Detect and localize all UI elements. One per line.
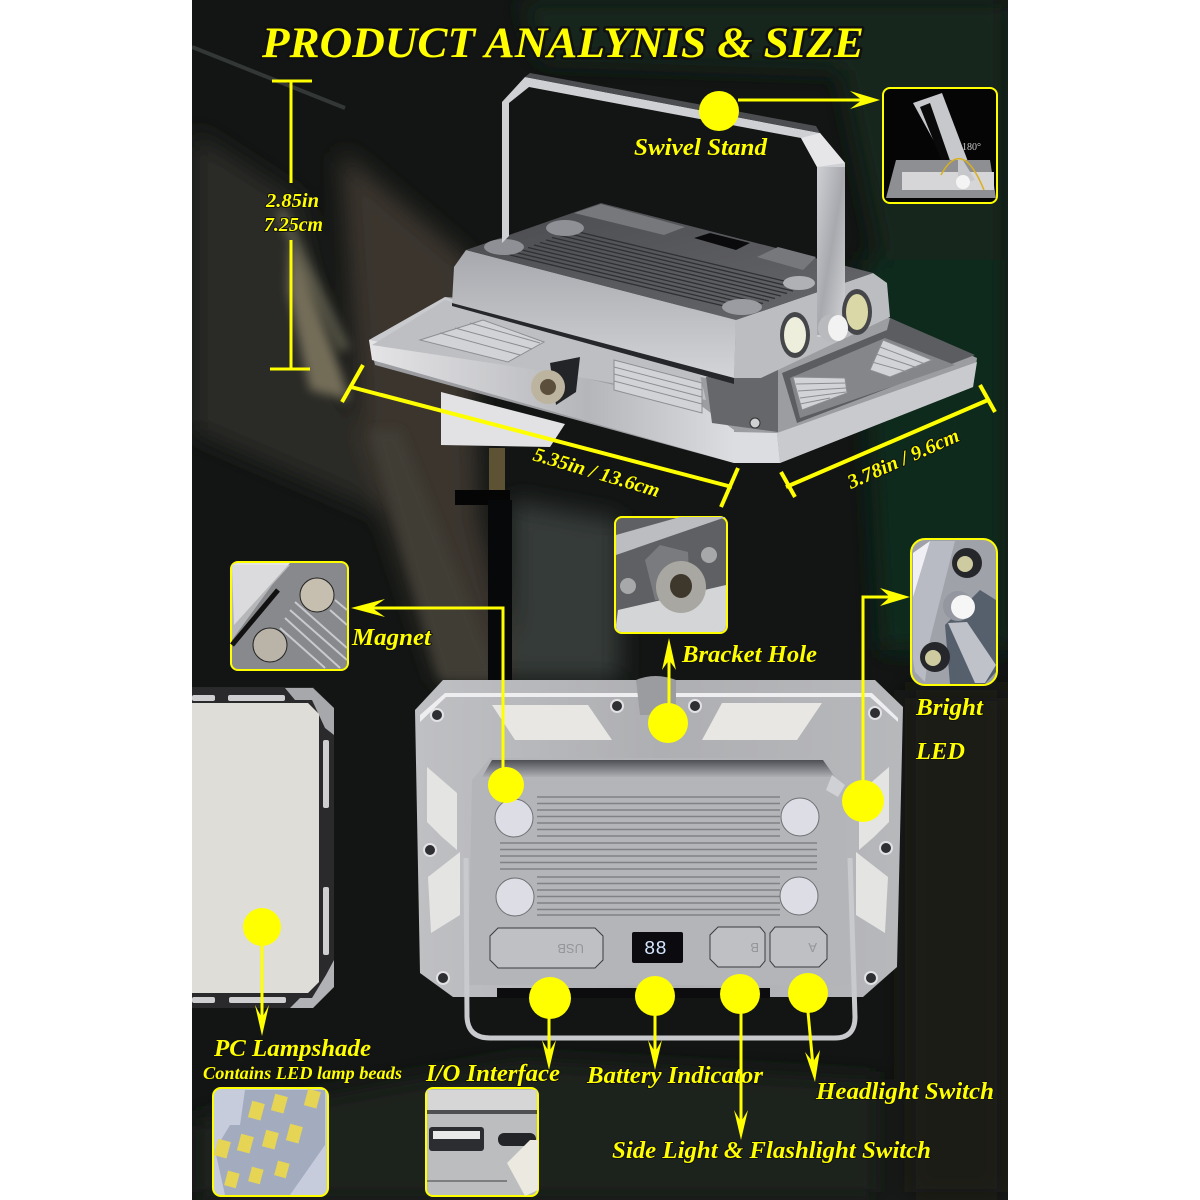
screws: [424, 700, 892, 984]
width dimension: 5.35in / 13.6cm: [531, 444, 662, 502]
bright LED label: [915, 695, 984, 765]
dark side panel: [706, 370, 778, 432]
USB button: [490, 928, 603, 968]
depth dimension: 3.78in / 9.6cm: [843, 425, 963, 494]
inset: magnet: [231, 562, 348, 670]
inset: LED beads: [213, 1088, 328, 1196]
product: back view lamp: A: [808, 940, 817, 955]
side light and flashlight switch callout: Side Light & Flashlight Switch: [612, 1138, 931, 1164]
PC lampshade callout: Contains LED lamp beads: [203, 1063, 402, 1083]
bright LED label: Bright: [915, 695, 984, 721]
mount underneath: [441, 392, 565, 447]
LEDs: [780, 312, 810, 358]
bottom slot: [497, 988, 770, 998]
PC lampshade callout: PC Lampshade: [213, 1036, 371, 1062]
bracket hole label: Bracket Hole: [681, 642, 817, 668]
handle: [502, 77, 845, 337]
top display: [694, 233, 750, 250]
lower vents: [420, 320, 932, 413]
side lights: [427, 767, 457, 850]
inset: bright LED: [911, 539, 997, 685]
battery indicator callout: Battery Indicator: [586, 1063, 764, 1089]
digital display: [632, 932, 683, 963]
corner chrome: [734, 432, 780, 463]
screw: [750, 418, 760, 428]
swivel stand callout: Swivel Stand: [634, 135, 768, 161]
bracket hole: [550, 357, 580, 405]
top ridges: [510, 230, 805, 311]
I/O interface callout: I/O Interface: [425, 1061, 560, 1087]
background photo: tent at night: [192, 0, 1008, 1200]
top circular pads: [484, 239, 524, 255]
bracket hole callout line: [648, 638, 688, 743]
depth dimension: [781, 385, 995, 497]
upper housing front face: [452, 250, 736, 378]
inset: I/O ports: [426, 1088, 538, 1196]
magnet pads: [495, 798, 819, 916]
swivel stand callout: [634, 91, 880, 161]
title: PRODUCT ANALYNIS & SIZE: [261, 20, 864, 67]
center plate: [468, 758, 850, 985]
PC lampshade callout: [203, 908, 402, 1083]
battery indicator callout: [586, 976, 764, 1089]
base plate: [369, 297, 977, 463]
product: angled view lamp: [369, 73, 977, 463]
top USB and button panels: [574, 204, 685, 235]
inset: swivel stand: 180°: [962, 142, 981, 153]
upper housing right face: [734, 273, 890, 378]
product: back view lamp: 88: [644, 938, 667, 960]
height dimension: 2.85in: [265, 190, 319, 212]
height dimension: 7.25cm: [264, 214, 323, 236]
pivot: [818, 314, 846, 342]
headlight switch callout: [788, 973, 994, 1105]
upper housing top face: [466, 203, 873, 320]
side light and flashlight switch callout: [612, 974, 931, 1164]
inset: bracket hole: [615, 517, 727, 633]
width dimension: [342, 365, 738, 507]
ridges: [500, 797, 817, 915]
product: back view lamp: B: [750, 940, 759, 955]
top lights: [492, 705, 612, 740]
left panel: PC lampshade: [192, 687, 334, 1008]
top bracket: [636, 676, 676, 715]
switch buttons: [710, 927, 765, 967]
product: back view lamp: USB: [557, 941, 584, 956]
inset: swivel stand: [883, 88, 997, 203]
magnet label: Magnet: [351, 625, 432, 651]
I/O interface callout: [425, 977, 571, 1087]
magnet callout line: [351, 599, 524, 803]
headlight switch callout: Headlight Switch: [815, 1079, 994, 1105]
bright LED label: LED: [915, 739, 965, 765]
product: back view lamp: [415, 676, 903, 1038]
bright LED callout line: [842, 588, 910, 822]
height dimension: [264, 81, 323, 369]
right plate: [782, 318, 975, 423]
handle: [466, 858, 855, 1038]
